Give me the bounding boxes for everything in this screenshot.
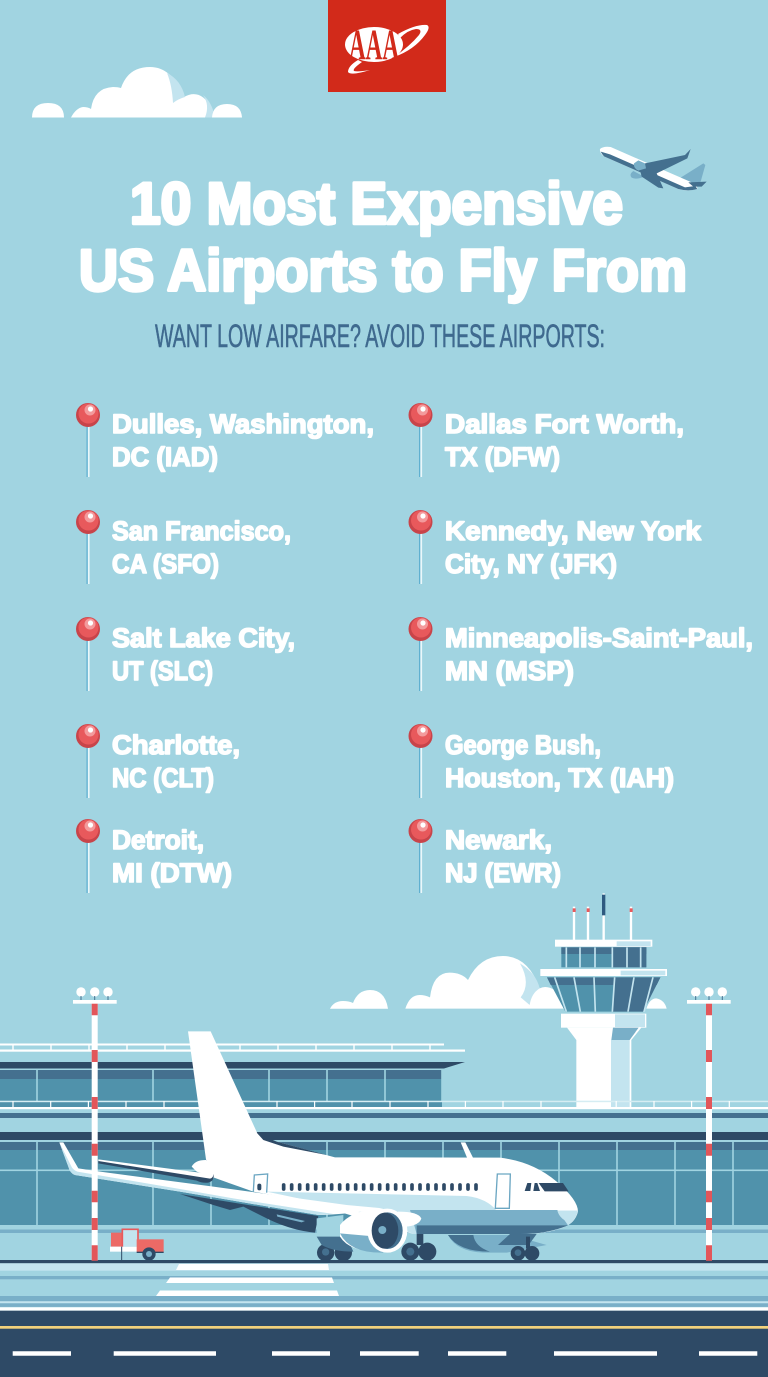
- airport: George Bush: [408, 724, 674, 798]
- horizontal stabiliser: [98, 1159, 230, 1183]
- airport: Minneapolis-Saint-Paul: MN (MSP): [445, 656, 574, 686]
- airport: Detroit: [76, 819, 232, 893]
- rear door and cabin windows: [253, 1174, 476, 1193]
- cloud: top left: [32, 67, 242, 118]
- upper terminal level: [0, 1044, 465, 1107]
- icon: small plane in flight: [600, 147, 707, 190]
- cloud: large behind tower: [405, 956, 667, 1009]
- airport: Charlotte: [76, 724, 240, 798]
- airport: Charlotte: Charlotte,: [112, 730, 240, 760]
- light pole: left: [73, 987, 117, 1261]
- title: [79, 172, 687, 304]
- balcony railing: [0, 1101, 768, 1109]
- airport: Kennedy: Kennedy, New York: [445, 516, 702, 546]
- lower terminal glazing: [0, 1142, 768, 1225]
- airport: Newark: NJ (EWR): [445, 858, 561, 888]
- airport: Dulles: DC (IAD): [112, 442, 218, 472]
- airport: San Francisco: San Francisco,: [112, 516, 291, 546]
- main wing: [59, 1142, 383, 1215]
- airport: Minneapolis-Saint-Paul: [408, 617, 753, 691]
- terminal building: [0, 1044, 768, 1233]
- airport: Dulles: Dulles, Washington,: [112, 409, 374, 439]
- landing gear: [317, 1234, 539, 1261]
- airliner: [59, 1031, 578, 1261]
- airport: Charlotte: NC (CLT): [112, 763, 214, 793]
- front door and cockpit: [495, 1174, 569, 1208]
- airport: Minneapolis-Saint-Paul: Minneapolis-Saint-Paul,: [445, 623, 753, 653]
- airport: Salt Lake City: UT (SLC): [112, 656, 213, 686]
- rear belly fairing: [448, 1235, 547, 1253]
- airport: Salt Lake City: Salt Lake City,: [112, 623, 295, 653]
- title: US Airports to Fly From: [79, 238, 687, 304]
- dorsal fin and far wing: [461, 1142, 473, 1158]
- logo: AAA red badge: [328, 0, 446, 92]
- airport: San Francisco: [76, 510, 291, 584]
- airport: Kennedy: [408, 510, 702, 584]
- light pole: right: [687, 987, 731, 1261]
- airport: Salt Lake City: [76, 617, 295, 691]
- tail root notch: [257, 1133, 327, 1155]
- airport: George Bush: George Bush,: [445, 730, 601, 760]
- apron and runway: [0, 1260, 768, 1377]
- airport: Detroit: MI (DTW): [112, 858, 232, 888]
- airport: Detroit: Detroit,: [112, 825, 204, 855]
- title: 10 Most Expensive: [130, 172, 623, 236]
- logo: AAA red badge: AAA: [349, 22, 399, 69]
- service truck: [110, 1229, 164, 1261]
- airport: Newark: Newark,: [445, 825, 552, 855]
- fuselage: [188, 1031, 578, 1234]
- airport: George Bush: Houston, TX (IAH): [445, 763, 674, 793]
- cloud: small behind terminal: [330, 990, 388, 1009]
- airport: Dallas Fort Worth: [408, 403, 684, 477]
- airport: Dulles: [76, 403, 374, 477]
- airport: Kennedy: City, NY (JFK): [445, 549, 617, 579]
- airport: Dallas Fort Worth: TX (DFW): [445, 442, 560, 472]
- airport: Dallas Fort Worth: Dallas Fort Worth,: [445, 409, 684, 439]
- engine: [317, 1208, 421, 1253]
- wing underside: [180, 1194, 318, 1233]
- control tower: [540, 893, 667, 1109]
- airport: Newark: [408, 819, 561, 893]
- airport: San Francisco: CA (SFO): [112, 549, 219, 579]
- belly stripes: [267, 1192, 578, 1234]
